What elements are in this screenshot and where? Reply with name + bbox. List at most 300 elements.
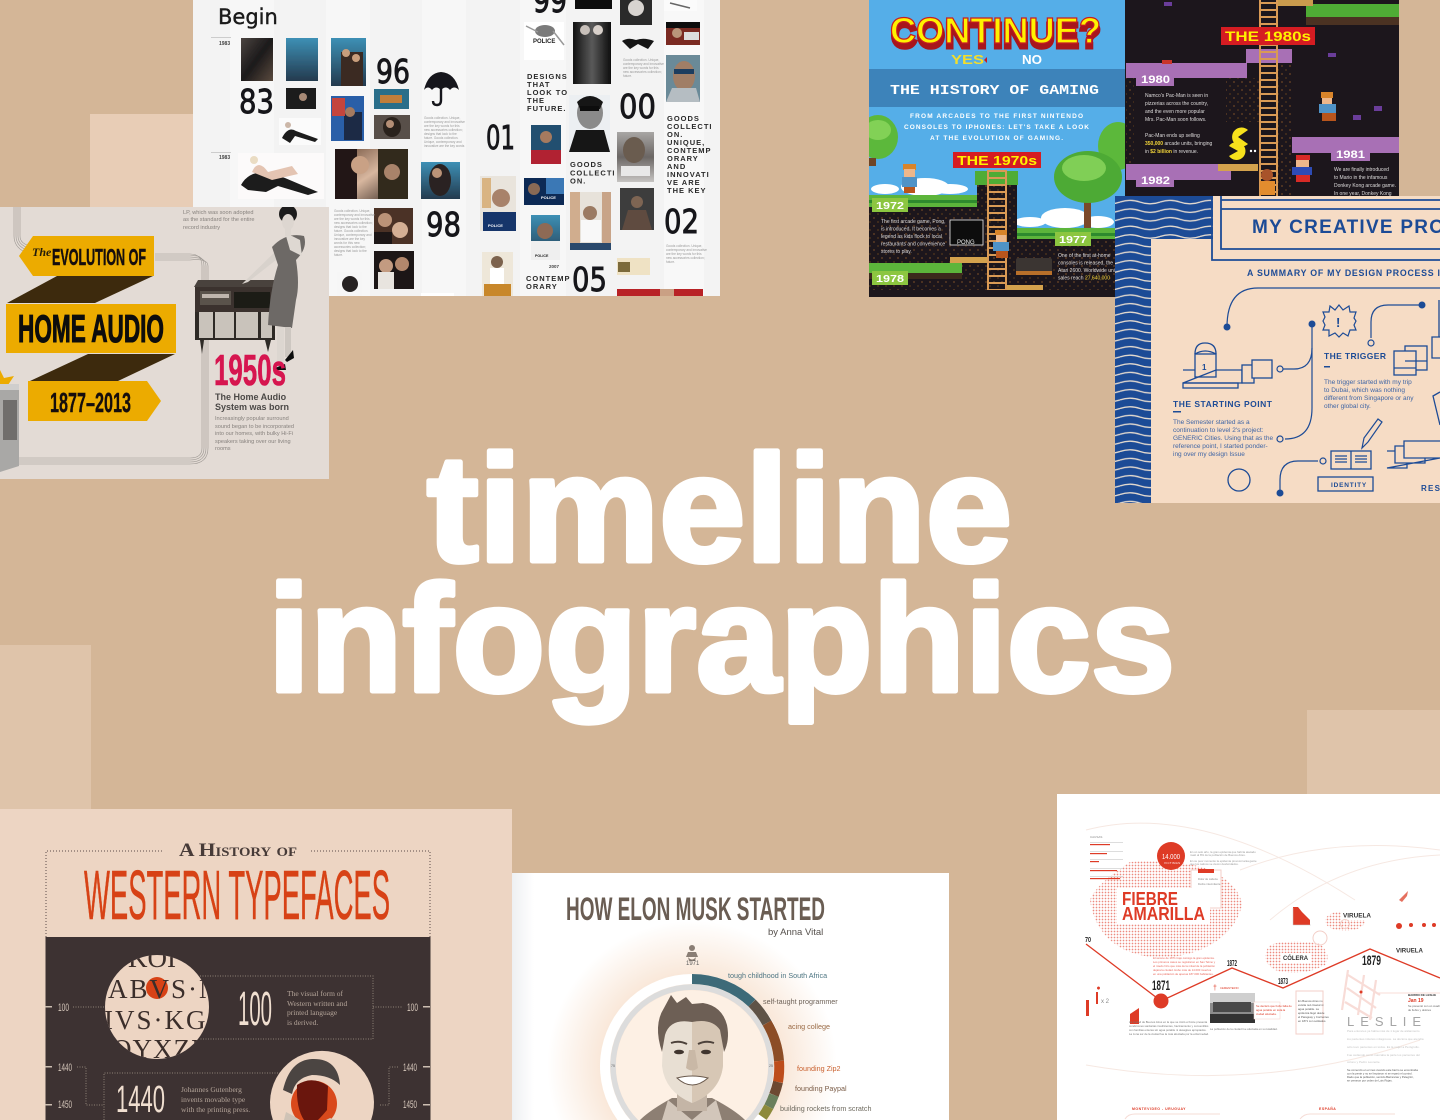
pong screen: PONG <box>957 240 975 246</box>
footer tags <box>1132 1106 1336 1111</box>
small body text: future. Goods collection. <box>334 229 368 233</box>
circle: gutenberg portrait <box>270 1051 374 1120</box>
clouds <box>871 178 1114 228</box>
heading: the trigger: THE TRIGGER <box>1324 351 1386 361</box>
map note: de fiebre y dolores <box>1408 1008 1432 1012</box>
label: res: RES <box>1421 484 1440 493</box>
text 1972: stores to play. <box>881 249 912 255</box>
tag: hospital: † <box>1213 985 1217 992</box>
byline: by Anna Vital <box>768 927 823 938</box>
title: infographics <box>268 554 1175 724</box>
body: lp note <box>183 210 255 231</box>
text 1977: Atari 2600. Worldwide unit <box>1058 268 1117 274</box>
heading: continue: CONTINUE? <box>890 10 1101 51</box>
text 1981: to Mario in the infamous <box>1334 175 1388 181</box>
text 1980: pizzerias across the country, <box>1145 101 1208 107</box>
tag: hospital: CEMENTERIO <box>1220 986 1239 990</box>
year numerals <box>239 0 699 299</box>
year tag 1981: 1981 <box>1336 149 1365 161</box>
text 1972: legend as kids flock to local <box>881 234 942 240</box>
note: hospital: ciudad afectada. <box>1256 1012 1277 1016</box>
timeline labels: self-taught programmer <box>763 997 838 1006</box>
text 1977: consoles is released, the <box>1058 260 1113 266</box>
body: leslie: los pacientes infectos milagrosos. La doctora que atendía <box>1347 1037 1424 1041</box>
small body text: Unique, contemporary and <box>334 233 372 237</box>
photo grid: right columns <box>480 0 703 296</box>
note card <box>1296 991 1329 1034</box>
circle: roman letters: KOI <box>128 943 176 973</box>
tree left <box>869 115 898 166</box>
subheading: A SUMMARY OF MY DESIGN PROCESS I <box>1247 268 1440 278</box>
timeline labels: tough childhood in South Africa <box>728 971 827 980</box>
year tag 1972: 1972 <box>876 201 905 212</box>
label: 1980s: THE 1980s <box>1225 28 1311 44</box>
note: hospital: Se declaró que hubo falta de <box>1256 1004 1292 1008</box>
heading: leslie: LESLIE <box>1347 1014 1427 1029</box>
captions: DESIGNS <box>527 72 568 81</box>
label: 1970s: THE 1970s <box>957 153 1037 168</box>
intro text: FROM ARCADES TO THE FIRST NINTENDO <box>910 113 1083 120</box>
small body text: are the key words for this <box>666 252 702 256</box>
glow <box>547 921 837 1120</box>
note card: el Paraguay y Corrientes <box>1298 1015 1329 1019</box>
icon: pac-man characters <box>1229 127 1256 160</box>
labels: diseases: VIRUELA <box>1396 948 1423 954</box>
banner: dates: 1877–2013 <box>50 387 131 418</box>
year tag 1972 <box>872 198 908 212</box>
trigger body: different from Singapore or any <box>1324 395 1414 402</box>
open nodes <box>1277 340 1374 464</box>
menu: yes no <box>951 55 1042 64</box>
circle: roman letters <box>104 943 228 1064</box>
heading: home audio system: The Home Audio <box>215 392 287 402</box>
year labels: 1879 <box>1362 952 1381 968</box>
heading: home audio system <box>215 392 289 412</box>
small body texts <box>1129 1020 1278 1036</box>
small body text: are the key words for this <box>334 217 370 221</box>
year numerals: 01 <box>486 118 515 157</box>
note card: epidemia llegó desde <box>1298 1011 1325 1015</box>
captions: COLLECTI <box>667 122 712 131</box>
character 2 <box>993 230 1009 258</box>
faint arcs <box>1086 823 1440 1076</box>
circle: roman letters: QYXZI <box>112 1034 201 1064</box>
year numerals: 00 <box>619 87 656 126</box>
small body text: future. <box>334 253 343 257</box>
icon: paint bucket and platform: 1 <box>1202 363 1207 372</box>
notes: victims <box>1190 850 1257 866</box>
body: 1950s: Increasingly popular surround <box>215 416 289 422</box>
icon: person ratio: x 2 <box>1101 999 1110 1005</box>
year numerals: 98 <box>426 205 461 244</box>
footer frames <box>1125 1114 1395 1119</box>
banner shadows <box>7 276 175 381</box>
captions: LOOK TO <box>527 88 568 97</box>
bar list: CAUSAS <box>1090 835 1102 839</box>
intro text <box>904 113 1089 142</box>
console <box>1016 258 1052 275</box>
marker: leslie <box>1360 990 1362 994</box>
year labels <box>1085 937 1381 993</box>
map note: BARRIO DE LESLIE <box>1408 993 1436 997</box>
text: gutenberg: with the printing press. <box>181 1105 250 1114</box>
partial icon right <box>1433 392 1440 425</box>
note: leslie: Se comenzó en el mes cuando este barrio se encontraba <box>1347 1068 1418 1072</box>
small body text: Goods collection. Unique, <box>623 58 659 62</box>
side ticks: 100 <box>58 1002 69 1014</box>
year tag 1982 <box>1136 176 1174 187</box>
small body text: contemporary and innovative <box>334 213 375 217</box>
callout: 14.000 victims: VICTIMAS <box>1164 861 1180 865</box>
menu: yes no: NO <box>1022 52 1042 67</box>
photo grid: left columns <box>238 38 460 296</box>
text: gutenberg <box>181 1085 250 1114</box>
circle: roman letters: ABVS·M <box>108 974 225 1004</box>
footer tags: MONTEVIDEO - URUGUAY <box>1132 1107 1186 1111</box>
text 1980: Pac-Man ends up selling <box>1145 133 1200 139</box>
text 1981: We are finally introduced <box>1334 167 1389 173</box>
tag: hospital <box>1213 985 1239 992</box>
body: 1950s: sound began to be incorporated <box>215 424 294 430</box>
year tag 1978: 1978 <box>876 274 905 285</box>
small body text: designs that look to the <box>334 249 367 253</box>
text 1977 <box>1058 253 1117 282</box>
timeline labels: founding Zip2 <box>797 1064 841 1073</box>
year 2007: 2007 <box>549 264 560 269</box>
captions: CONTEMP <box>667 146 712 155</box>
dotted frame <box>46 851 430 937</box>
icon: starburst: ! <box>1336 315 1340 330</box>
year markers <box>211 37 231 161</box>
decorative pale square left <box>0 645 91 809</box>
notes: victims: mató al 8% de la población de Buenos Aires. <box>1190 853 1246 857</box>
red notes: en una población de apenas 187.000 habitantes. <box>1153 972 1214 976</box>
year tag 1982: 1982 <box>1141 175 1170 187</box>
figure: street map <box>1342 970 1440 1020</box>
year tag 1977 <box>1055 232 1091 246</box>
starting point body: GENERIC Cities. Using that as the <box>1173 435 1273 442</box>
body: lp note: as the standard for the entire <box>183 217 255 223</box>
small body text: Goods collection. Unique, <box>424 116 460 120</box>
body: leslie: Para entonces ya había más de 1 lugar de aislamiento <box>1347 1029 1420 1033</box>
heading: continue: CONTINUE? <box>891 15 1101 56</box>
starting point body: continuation to level 2's project: <box>1173 427 1264 434</box>
small body text: innovative are the key <box>334 237 365 241</box>
year tag 1980 <box>1136 76 1174 86</box>
text: visual form: The visual form of <box>287 989 344 998</box>
year tag 1977: 1977 <box>1059 235 1088 246</box>
numeral: 1440: 1440 <box>116 1079 165 1120</box>
legend: symptoms: Vómitos <box>1198 887 1208 891</box>
starting point body: ing over my design Issue <box>1173 451 1245 458</box>
heading: home audio system: System was born <box>215 402 289 412</box>
starting point body <box>1173 411 1273 458</box>
band <box>869 69 1125 107</box>
notes: victims: En un solo año, la gran epidemia que habría atacado <box>1190 850 1256 854</box>
timeline panel dark <box>46 937 430 1120</box>
left shade <box>512 873 534 1120</box>
title <box>268 424 1175 724</box>
note: hospital <box>1254 1002 1292 1019</box>
year numerals: 96 <box>376 52 410 91</box>
trigger body: The trigger started with my trip <box>1324 379 1412 386</box>
small body text: new accessories collection; <box>623 70 662 74</box>
banner: the evolution of: EVOLUTION OF <box>52 244 146 270</box>
bar list <box>1090 835 1123 879</box>
text 1977: One of the first at-home <box>1058 253 1111 259</box>
heading: my creative process: MY CREATIVE PRO <box>1252 217 1440 238</box>
timeline line <box>1086 944 1440 1001</box>
tree right back <box>1098 122 1125 170</box>
year numerals: 02 <box>664 202 699 241</box>
note card: En Buenos Aires no <box>1298 999 1323 1003</box>
small body text: words for this new <box>334 241 360 245</box>
text: gutenberg: Johannes Gutenberg <box>181 1085 242 1094</box>
captions: ORARY <box>667 154 699 163</box>
starting point body: The Semester started as a <box>1173 419 1250 426</box>
decorative pale square right <box>1307 710 1440 794</box>
captions: FUTURE. <box>527 104 566 113</box>
labels: diseases: VIRUELA <box>1343 912 1371 920</box>
panel: western typefaces: 100 <box>238 983 272 1036</box>
menu: yes no: YES <box>951 52 984 67</box>
side ticks: 1450 <box>58 1099 72 1111</box>
banner: the evolution of: The <box>32 245 52 259</box>
heading: elon musk: HOW ELON MUSK STARTED <box>566 891 825 927</box>
small body text: future. <box>623 74 632 78</box>
panel: elon musk <box>512 873 949 1120</box>
text 1980: in $2 billion in revenue. <box>1145 149 1198 155</box>
captions: THE KEY <box>667 186 707 195</box>
captions: ON. <box>570 176 586 186</box>
banner: home audio: HOME AUDIO <box>18 308 164 351</box>
body: 1950s <box>215 416 294 452</box>
year tag 1980: 1980 <box>1141 74 1170 86</box>
body: 1950s: speakers taking over our living <box>215 439 291 445</box>
captions: COLLECTI <box>570 168 616 178</box>
notes: victims: En su peor momento la epidemia provocó tanta gente <box>1190 859 1257 863</box>
year: 1950s: 1950s <box>214 346 286 395</box>
circle: roman letters: IVS·KGC <box>104 1005 228 1035</box>
character: running boy <box>1319 92 1336 121</box>
small body text: Unique, contemporary and <box>424 140 462 144</box>
ring ages: 75 <box>611 1064 615 1068</box>
photo grid: right columns: POLICE <box>541 195 556 200</box>
footer tags: ESPAÑA <box>1319 1106 1336 1111</box>
small body text: are the key words for this <box>424 124 460 128</box>
timeline labels: acing college <box>788 1022 830 1031</box>
side ticks: 1440 <box>58 1062 72 1074</box>
small body text: Goods collection. Unique, <box>334 209 370 213</box>
text 1980: 350,000 arcade units, bringing <box>1145 141 1212 147</box>
text 1980 <box>1145 93 1212 155</box>
body: lp note: LP, which was soon adopted <box>183 210 254 216</box>
small body text: new accessories collection; <box>424 128 463 132</box>
starting point body: reference point, I started ponder- <box>1173 443 1268 450</box>
purple platforms <box>1126 49 1399 196</box>
dotted connectors <box>73 976 402 1120</box>
red notes: dejara la ciudad. Hubo más de 14.000 muertos <box>1153 968 1212 972</box>
banner: dates <box>28 381 161 421</box>
body: leslie: sólo tuvo pacientes en todos. Es la mujer a Perógrullo. <box>1347 1045 1420 1049</box>
wave border <box>1115 196 1213 503</box>
panel: eyewear timeline <box>193 0 720 299</box>
small body text <box>334 58 707 264</box>
captions: CONTEMP <box>526 274 570 283</box>
text 1981: In one year, Donkey Kong <box>1334 191 1392 197</box>
text 1981: Donkey Kong arcade game. <box>1334 183 1396 189</box>
note: leslie <box>1347 1068 1418 1082</box>
small body texts: La zona sur de la ciudad fue la más afectada por la enfermedad. <box>1129 1032 1209 1036</box>
side ticks: 1440 <box>403 1062 417 1074</box>
timeline labels: founding Paypal <box>795 1084 847 1093</box>
trigger body <box>1324 366 1414 410</box>
small body text: future. <box>666 260 675 264</box>
photo: hospital <box>1210 993 1255 1023</box>
red notes: Los primeros casos se registraron en San Telmo y <box>1153 960 1216 964</box>
panel: fiebre amarilla <box>1057 794 1440 1120</box>
banner: the evolution of <box>19 236 154 276</box>
heading: fiebre amarilla <box>1117 888 1210 924</box>
side ticks: 100 <box>407 1002 418 1014</box>
photo grid: right columns: POLICE <box>488 223 503 228</box>
body: leslie: colono y Pedro Leonette. <box>1347 1060 1381 1064</box>
dotted blob: viruela <box>1325 911 1365 931</box>
captions: GOODS <box>570 160 603 169</box>
illustration: record cabinet <box>194 280 275 354</box>
captions: THE <box>527 96 545 105</box>
small body text: innovative are the key words <box>424 144 465 148</box>
ring ages <box>611 1064 773 1068</box>
red notes: el miedo hizo que más de la mitad de la población <box>1153 964 1215 968</box>
text: visual form: is derived. <box>287 1018 318 1027</box>
photo grid: right columns: POLICE <box>533 39 555 45</box>
small body text: are the key words for this <box>623 66 659 70</box>
title: timeline <box>427 424 1012 594</box>
small body text: designs that look to the <box>334 225 367 229</box>
node: 1871 <box>1154 994 1168 1008</box>
text 1972: restaurants and convenience <box>881 242 945 248</box>
text 1980: Mrs. Pac-Man soon follows. <box>1145 117 1206 123</box>
small body text: contemporary and innovative <box>424 120 465 124</box>
text 1981 <box>1334 167 1396 197</box>
note: leslie: se cerraron por orden de Luis Rojas. <box>1347 1078 1393 1082</box>
red notes <box>1153 956 1216 976</box>
panel: gaming history <box>858 0 1399 297</box>
icon: person ratio <box>1086 987 1110 1016</box>
captions <box>526 72 712 291</box>
callout: 14.000 victims <box>1157 842 1185 870</box>
dotted blob: fiebre <box>1090 861 1242 958</box>
map note <box>1408 993 1440 1012</box>
year tag 1981 <box>1331 150 1370 161</box>
text: visual form: printed language <box>287 1008 338 1017</box>
legend: symptoms: Dolor de cabeza <box>1198 877 1218 881</box>
icon: pencil <box>1362 419 1382 448</box>
timeline labels <box>728 971 871 1113</box>
note: leslie: Dado que la población, servido Barrancas y Pelegrini, <box>1347 1075 1414 1079</box>
note: leslie: con la peste y no se limpiaron ni se reparó el control. <box>1347 1072 1413 1076</box>
trigger body: other global city. <box>1324 403 1371 410</box>
year numerals: 83 <box>239 82 274 121</box>
year labels: 1871 <box>1152 977 1170 993</box>
terrain <box>869 171 1125 297</box>
body: 1950s: into our homes, with bulky Hi-Fi <box>215 431 293 437</box>
captions: AND <box>667 162 686 171</box>
captions: ORARY <box>526 282 558 291</box>
year numerals: 05 <box>572 260 607 299</box>
captions: THAT <box>527 80 550 89</box>
character: climbing boy <box>1260 169 1275 195</box>
connector nodes <box>1224 302 1426 496</box>
body: lp note: record industry <box>183 225 220 231</box>
trigger body: to Dubai, which was nothing <box>1324 387 1405 394</box>
small body texts: con familias enteras sin agua potable ni desagües apropiados. <box>1129 1028 1207 1032</box>
ring base <box>600 974 784 1120</box>
heading: a history of: A History of <box>179 840 297 861</box>
timeline labels: building rockets from scratch <box>780 1104 871 1113</box>
map note: Jan 19 <box>1408 998 1424 1004</box>
small body texts: condiciones sanitarias insuficientes, hacinamiento y conventillos <box>1129 1024 1209 1028</box>
text 1980: Namco's Pac-Man is seen in <box>1145 93 1208 99</box>
small body text: designs that look to the <box>424 132 457 136</box>
ladder 1980s <box>1259 0 1278 197</box>
icon: starburst <box>1323 305 1356 337</box>
icon: stacked frames <box>1394 346 1427 375</box>
empty circle <box>1228 469 1250 491</box>
heading: fiebre amarilla: FIEBRE <box>1122 889 1178 909</box>
year: 1971: 1971 <box>686 961 700 967</box>
note: hospital: agua potable en toda la <box>1256 1008 1286 1012</box>
ladder 1970s <box>987 170 1007 290</box>
partial frame right <box>1432 300 1440 358</box>
legend: symptoms <box>1191 869 1221 908</box>
year markers: 1983 <box>219 155 230 161</box>
icon: syringe <box>1399 891 1408 902</box>
ring timeline segments <box>692 979 779 1117</box>
heading: fiebre amarilla: AMARILLA <box>1122 904 1205 924</box>
small body text: future. Goods collection. <box>424 136 458 140</box>
text 1972 <box>881 219 945 255</box>
dark 1980s section <box>1125 0 1399 197</box>
title frame <box>1212 196 1440 260</box>
callout: 14.000 victims: 14.000 <box>1162 852 1180 861</box>
icon: book <box>1331 451 1371 469</box>
tree main <box>1054 151 1122 228</box>
text: visual form: Western written and <box>287 999 347 1008</box>
year labels: 1872 <box>1227 959 1237 968</box>
icon: baby <box>686 945 698 961</box>
enemy sprites <box>1162 2 1382 120</box>
captions: ON. <box>667 130 683 139</box>
panel: creative process <box>1115 196 1440 503</box>
captions: GOODS <box>667 114 700 123</box>
pong screen <box>950 220 983 246</box>
text 1972: is introduced. It becomes a <box>881 226 941 232</box>
intro text: AT THE EVOLUTION OF GAMING. <box>930 135 1063 142</box>
body: 1950s: rooms <box>215 446 231 452</box>
note card: existía red cloacal ni <box>1298 1003 1324 1007</box>
panel: western typefaces: WESTERN TYPEFACES <box>84 856 390 934</box>
striped route lines <box>14 207 208 464</box>
connector lines <box>1227 288 1440 493</box>
illustration: radio <box>0 370 19 472</box>
year tag 1978 <box>872 271 908 285</box>
icon: stacked research frames <box>1387 441 1440 468</box>
icon: umbrella <box>424 72 459 105</box>
notes: victims: que los nativos se vieron desbordados. <box>1190 862 1239 866</box>
chart: cholera area <box>1293 906 1311 925</box>
